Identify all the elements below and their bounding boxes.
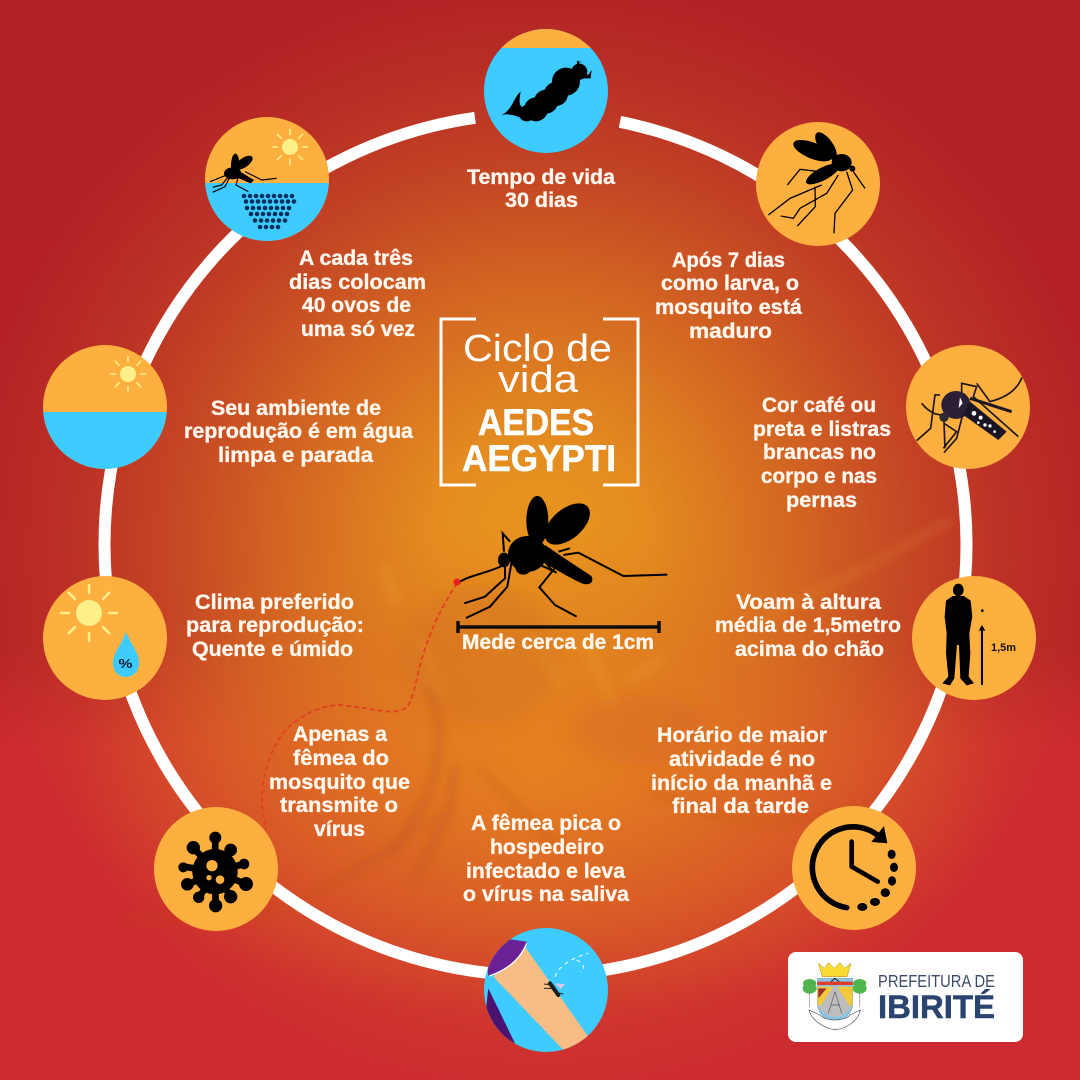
flight path: red dashed line xyxy=(262,583,457,830)
text: apenas a fêmea: Apenas a xyxy=(293,723,387,746)
text: a fêmea pica: hospedeiro xyxy=(490,836,604,859)
icon: virus xyxy=(154,807,278,931)
text: cor café: preta e listras xyxy=(753,418,891,441)
text: cor café: Cor café ou xyxy=(762,394,876,417)
text: apenas a fêmea: fêmea do xyxy=(293,747,389,770)
text: voam à altura: Voam à altura xyxy=(736,591,881,614)
panel: larva, tempo de vida xyxy=(467,29,615,212)
text: seu ambiente: reprodução é em água xyxy=(184,420,413,443)
text: a cada três: A cada três xyxy=(299,247,413,270)
text: horário: Horário de maior xyxy=(657,724,827,747)
text: a fêmea pica: A fêmea pica o xyxy=(471,812,621,835)
text: clima preferido: Clima preferido xyxy=(195,591,354,614)
text: tempo de vida: Tempo de vida xyxy=(467,166,615,189)
text: após 7 dias xyxy=(655,249,802,343)
text: voam à altura xyxy=(715,591,901,661)
text: após 7 dias: Após 7 dias xyxy=(672,249,785,272)
logo text: IBIRITÉ xyxy=(878,989,995,1025)
title: ciclo de vida: vida xyxy=(498,359,579,401)
text: a fêmea pica: o vírus na saliva xyxy=(463,883,629,906)
text: a cada três: uma só vez xyxy=(301,318,415,341)
icon: clock xyxy=(792,806,916,930)
text: tempo de vida xyxy=(467,166,615,212)
text: após 7 dias: mosquito está xyxy=(655,296,802,319)
icon: sun and humidity drop xyxy=(43,576,167,700)
icon: sun and humidity drop: % xyxy=(118,656,133,671)
panel: adult mosquito after 7 days xyxy=(655,122,880,343)
panel: activity time xyxy=(651,724,916,930)
title block xyxy=(441,319,638,485)
panel: breeding environment xyxy=(43,345,413,472)
text: clima preferido xyxy=(186,591,364,661)
panel: bite xyxy=(463,812,629,1053)
icon: tiger mosquito xyxy=(906,345,1030,469)
text: horário: atividade é no xyxy=(669,748,815,771)
text: cor café: corpo e nas xyxy=(761,465,877,488)
text: clima preferido: para reprodução: xyxy=(186,614,364,637)
icon: mosquito laying eggs xyxy=(205,117,329,243)
panel: flight height xyxy=(715,576,1036,700)
panel: virus transmission xyxy=(154,723,410,931)
title: aedes aegypti: AEGYPTI xyxy=(462,438,616,479)
crest xyxy=(803,963,867,1029)
text: horário: início da manhã e xyxy=(651,772,832,795)
text: a fêmea pica: infectado e leva xyxy=(466,860,625,883)
panel: eggs xyxy=(205,117,426,341)
text: mede cerca de 1cm: Mede cerca de 1cm xyxy=(462,631,654,654)
logo panel: prefeitura de ibirité xyxy=(788,952,1023,1042)
text: voam à altura: acima do chão xyxy=(735,638,884,661)
red dot at proboscis xyxy=(454,578,460,586)
text: seu ambiente: limpa e parada xyxy=(218,444,373,467)
icon: person with height arrow: 1,5m xyxy=(991,642,1016,654)
text: seu ambiente: Seu ambiente de xyxy=(211,397,381,420)
text: a fêmea pica xyxy=(463,812,629,906)
text: apenas a fêmea xyxy=(269,723,410,841)
scale bar xyxy=(458,621,659,654)
logo text: PREFEITURA DE xyxy=(878,971,995,991)
text: tempo de vida: 30 dias xyxy=(505,189,578,212)
text: após 7 dias: maduro xyxy=(689,320,772,343)
text: cor café xyxy=(753,394,891,512)
icon: larva in water xyxy=(484,29,608,153)
icon: mature mosquito xyxy=(756,122,880,246)
text: cor café: pernas xyxy=(786,489,857,512)
logo text xyxy=(878,971,995,1025)
icon: sun over clean water xyxy=(43,345,167,472)
title frame brackets xyxy=(441,319,638,485)
text: apenas a fêmea: vírus xyxy=(314,818,365,841)
central mosquito illustration xyxy=(454,495,667,618)
text: a cada três: 40 ovos de xyxy=(302,294,411,317)
text: apenas a fêmea: transmite o xyxy=(280,794,398,817)
text: a cada três xyxy=(289,247,426,341)
text: a cada três: dias colocam xyxy=(289,271,426,294)
text: voam à altura: média de 1,5metro xyxy=(715,614,901,637)
title: aedes aegypti: AEDES xyxy=(478,402,594,443)
text: horário xyxy=(651,724,832,818)
panel: striped body colour xyxy=(753,345,1030,512)
text: seu ambiente xyxy=(184,397,413,467)
title: aedes aegypti xyxy=(462,402,616,479)
icon: person with height arrow xyxy=(912,576,1036,700)
white ring connecting the steps xyxy=(104,118,966,976)
icon: mosquito on a leg xyxy=(483,928,608,1053)
title: ciclo de vida: Ciclo de xyxy=(463,328,612,370)
panel: climate xyxy=(43,576,364,700)
title: ciclo de vida xyxy=(463,328,612,401)
text: após 7 dias: como larva, o xyxy=(661,272,799,295)
text: clima preferido: Quente e úmido xyxy=(192,638,353,661)
text: horário: final da tarde xyxy=(672,795,809,818)
text: cor café: brancas no xyxy=(763,441,876,464)
text: apenas a fêmea: mosquito que xyxy=(269,771,410,794)
